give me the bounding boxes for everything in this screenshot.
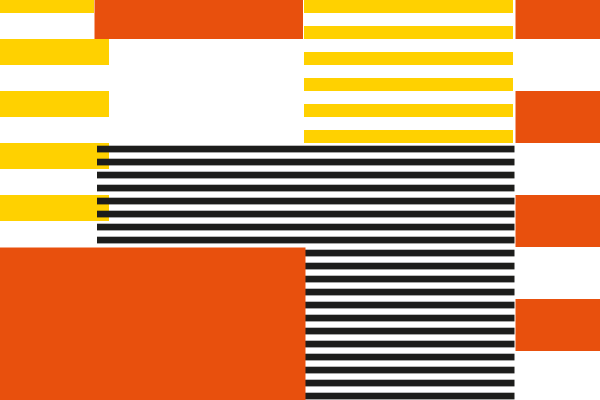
panel: top orange block xyxy=(94,0,303,39)
panel: right orange blocks xyxy=(516,0,600,351)
panel: centre yellow stripes xyxy=(304,0,513,143)
panel: bottom-left orange block xyxy=(0,248,306,400)
panel: left yellow stripes xyxy=(0,0,109,221)
panel: black stripes xyxy=(97,146,514,399)
